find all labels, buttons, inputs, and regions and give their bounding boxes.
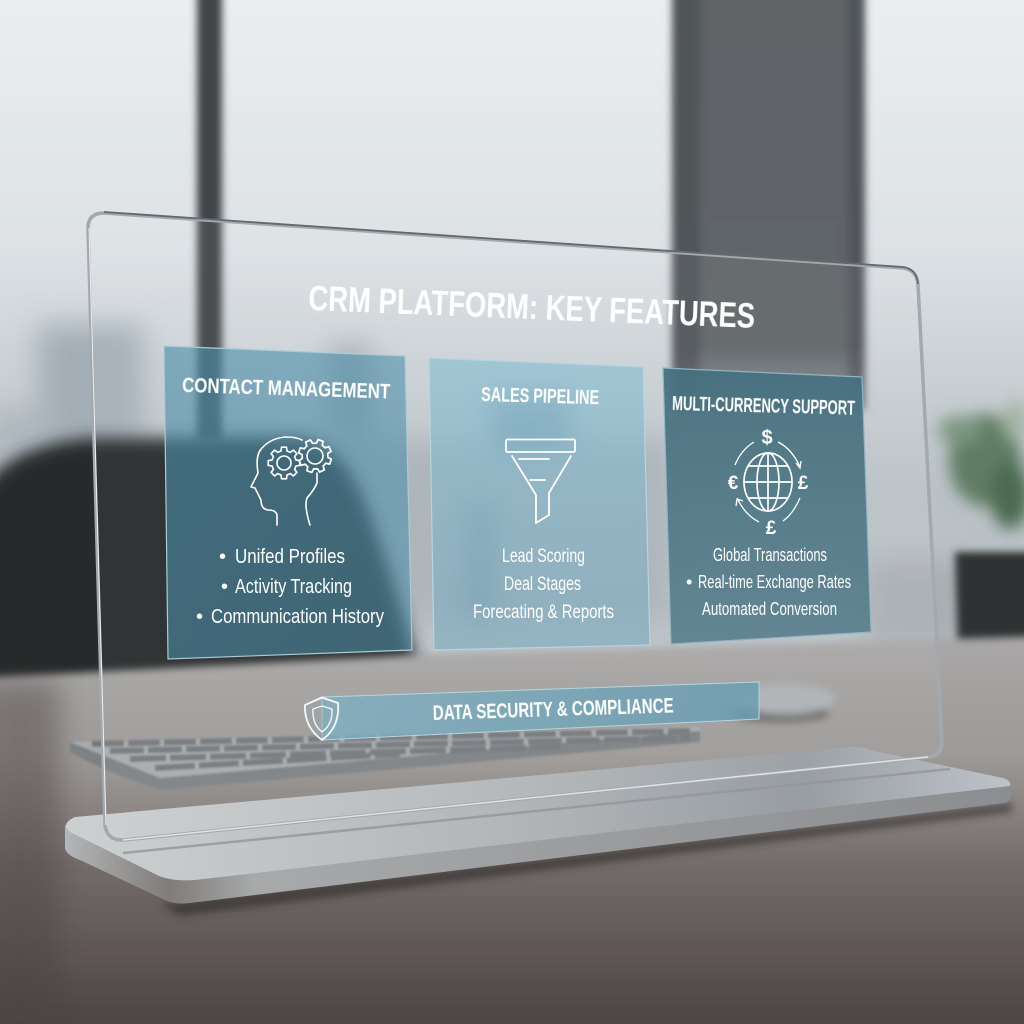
bullet list: contact features: •: [221, 576, 228, 598]
heading: contact management: CONTACT MANAGEMENT: [182, 374, 391, 404]
desk: [0, 636, 1024, 1024]
list: pipeline features: [473, 546, 614, 623]
list: currency features: Automated Conversion: [702, 599, 837, 619]
stand base: [65, 747, 1012, 916]
bullet list: contact features: Communication History: [211, 606, 384, 628]
icon: globe with currencies: £: [766, 518, 777, 539]
panel: contact management: [164, 346, 412, 659]
bullet list: contact features: Unifed Profiles: [235, 546, 345, 568]
bullet list: contact features: [196, 546, 384, 628]
glass panel: [88, 212, 942, 840]
list: currency features: [686, 545, 851, 619]
chair: [0, 437, 425, 690]
banner label: DATA SECURITY & COMPLIANCE: [432, 694, 674, 725]
keyboard: [70, 727, 700, 790]
icon: shield: [305, 698, 338, 740]
heading: multi-currency support: MULTI-CURRENCY SUPPORT: [672, 393, 855, 420]
office background: [0, 0, 1024, 700]
icon: globe with currencies: £: [798, 473, 809, 494]
title: CRM PLATFORM: KEY FEATURES: [308, 279, 756, 336]
panel: multi-currency support: [663, 368, 871, 644]
list: currency features: Global Transactions: [713, 545, 827, 565]
plant: [938, 400, 1024, 660]
icon: globe with currencies: $: [761, 427, 773, 449]
bullet list: contact features: •: [196, 606, 203, 628]
mouse: [730, 684, 835, 722]
panel: sales pipeline: [429, 358, 650, 650]
list: currency features: Real-time Exchange Rates: [698, 572, 851, 592]
icon: head with gears: [251, 435, 336, 525]
list: pipeline features: Forecating & Reports: [473, 602, 614, 623]
icon: globe with currencies: [728, 427, 809, 539]
list: pipeline features: Deal Stages: [504, 574, 581, 595]
list: pipeline features: Lead Scoring: [502, 546, 585, 567]
bullet list: contact features: Activity Tracking: [235, 576, 352, 598]
icon: funnel: [506, 440, 575, 523]
heading: sales pipeline: SALES PIPELINE: [481, 384, 599, 409]
list: currency features: •: [686, 572, 692, 592]
icon: globe with currencies: €: [728, 473, 739, 494]
bullet list: contact features: •: [219, 546, 226, 568]
banner: data security and compliance: [305, 682, 759, 740]
